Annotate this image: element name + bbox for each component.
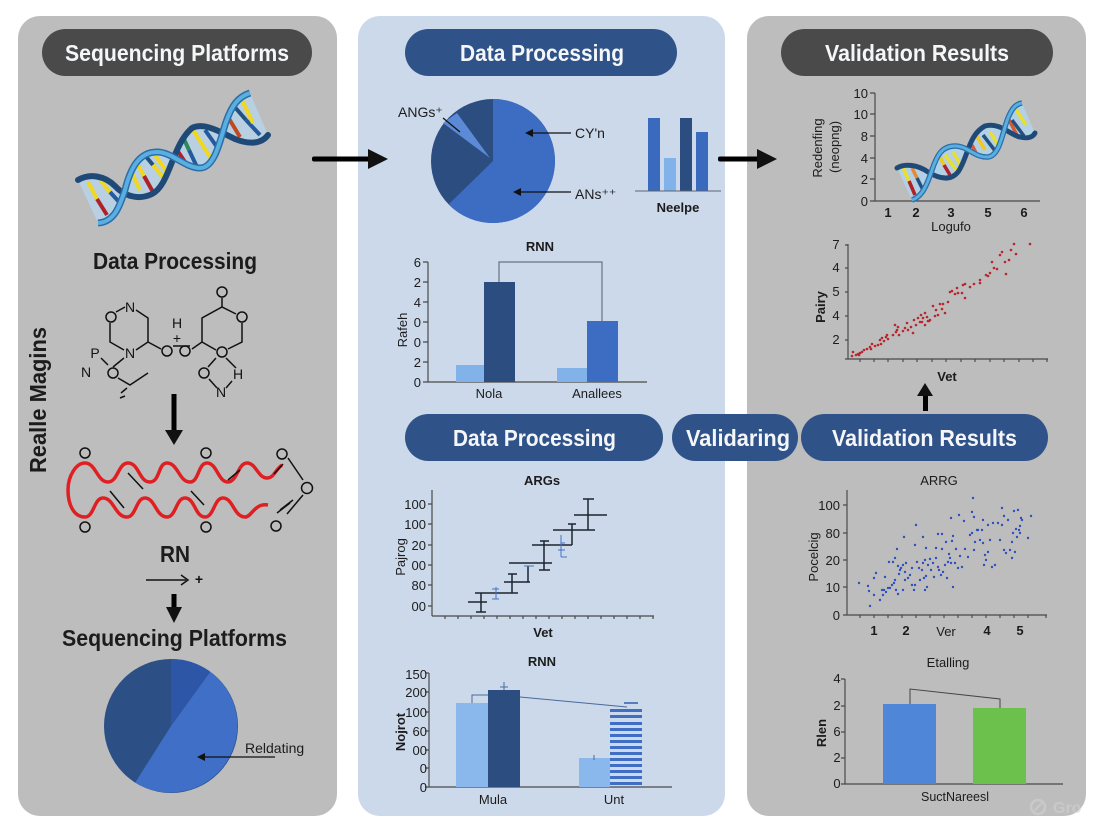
pill: validaring [672, 414, 798, 461]
scatter plot: red: Vet [937, 369, 957, 384]
label: RN: RN [160, 541, 190, 567]
scatter plot: blue: 20 [826, 553, 840, 568]
bar chart: RNN: Anallees [572, 386, 622, 401]
scatter plot: red: 7 [832, 237, 840, 252]
scatter plot: blue: 100 [818, 498, 840, 513]
bar chart: etalling: Etalling [927, 655, 969, 670]
bar chart: RNN lower: 150 [405, 667, 427, 682]
callout: reldating [197, 740, 304, 761]
chart: dna over axes: 4 [861, 151, 868, 166]
arrow: processing to validation [718, 149, 777, 169]
heading: data processing: Data Processing [460, 40, 624, 66]
pie chart: sequencing [104, 659, 304, 793]
bar chart: RNN lower: 100 [405, 705, 427, 720]
scatter plot: blue: 1 [870, 623, 878, 638]
scatter plot: blue: 80 [826, 526, 840, 541]
chart: dna over axes: 2 [861, 172, 868, 187]
bar chart: RNN: 2 [414, 275, 421, 290]
chart: dna over axes: 2 [912, 205, 920, 220]
scatter plot: blue: 10 [826, 580, 840, 595]
arrow: down to platforms [166, 594, 182, 623]
scatter plot: red: Pairy [813, 290, 828, 323]
heading: sequencing platforms [42, 29, 312, 76]
chart: dna over axes: 8 [861, 129, 868, 144]
bar chart: RNN lower: Nojrot [393, 712, 408, 751]
arrow: thin reaction [146, 571, 203, 587]
pie label: ANGs [398, 104, 460, 132]
bar chart: RNN lower: RNN [528, 654, 556, 669]
chart: dna over axes: 1 [884, 205, 892, 220]
chemical structure: H [172, 315, 182, 331]
pie label: CY'n: CY'n [575, 125, 605, 141]
molecule: red chain [68, 448, 312, 532]
error-bar chart: ARGs: ARGs [524, 473, 560, 488]
error-bar chart: ARGs: 100 [404, 517, 426, 532]
chart: dna over axes: 10 [854, 107, 868, 122]
bar chart: RNN [395, 239, 647, 401]
bar chart: RNN: 6 [414, 255, 421, 270]
bar chart: etalling: 2 [833, 750, 841, 765]
pie label: ANGs: ANGs⁺ [398, 104, 443, 120]
error-bar chart: ARGs: 00 [412, 599, 426, 614]
error-bar chart: ARGs: 00 [412, 558, 426, 573]
panel: sequencing platforms [18, 16, 337, 816]
chemical structure [81, 287, 247, 400]
error-bar chart: ARGs: 100 [404, 497, 426, 512]
scatter plot: blue: Ver [936, 624, 956, 639]
bar chart: neelpe [635, 118, 721, 215]
chart: dna over axes: 0 [861, 194, 868, 209]
watermark [1031, 800, 1082, 817]
heading: validation results [781, 29, 1053, 76]
panel: data processing [358, 16, 725, 816]
error-bar chart: ARGs: Vet [533, 625, 553, 640]
scatter plot: red: 4 [832, 260, 840, 275]
arrow: up to scatter [917, 383, 933, 411]
heading: sequencing platforms: Sequencing Platforms [65, 40, 289, 66]
scatter plot: red: 5 [832, 284, 840, 299]
chemical structure: H [233, 366, 243, 382]
chemical structure: N [125, 345, 135, 361]
bar chart: RNN: 2 [414, 355, 421, 370]
bar chart: etalling: SuctNareesl [921, 789, 989, 804]
error-bar chart: ARGs: 80 [412, 578, 426, 593]
chemical structure: N [216, 384, 226, 400]
bar chart: etalling: 6 [833, 724, 841, 739]
icon: dna helix [78, 93, 268, 223]
bar chart: RNN: 0 [414, 375, 421, 390]
bar chart: RNN: 0 [414, 335, 421, 350]
arrow: platforms to processing [312, 149, 388, 169]
bar chart: RNN: Rafeh [395, 313, 410, 347]
pie label: ANs: ANs⁺⁺ [575, 186, 616, 202]
bar chart: RNN lower: 200 [405, 685, 427, 700]
bar chart: RNN lower: Mula [479, 792, 508, 807]
chemical structure: N [125, 299, 135, 315]
bar chart: etalling: 0 [833, 776, 841, 791]
arrow: down to lipid [165, 394, 183, 445]
chart: dna over axes [810, 86, 1040, 234]
scatter plot: blue: 2 [902, 623, 910, 638]
pill: validation results [801, 414, 1048, 461]
chart: dna over axes: 10 [854, 86, 868, 101]
error-bar chart: ARGs: Pajrog [393, 538, 408, 576]
panel: validation results [747, 16, 1086, 817]
arrow: thin reaction: + [195, 571, 203, 587]
pill: data processing: Data Processing [453, 425, 616, 451]
chart: dna over axes: Redenfing [810, 118, 825, 178]
bar chart: neelpe: Neelpe [657, 200, 699, 215]
bar chart: etalling: 4 [833, 671, 841, 686]
bar chart: RNN: RNN [526, 239, 554, 254]
chemical structure: P [90, 345, 100, 361]
bar chart: etalling: 2 [833, 698, 841, 713]
pill: validaring: Validaring [686, 425, 790, 451]
heading: sequencing platforms lower: Sequencing Platforms [62, 625, 287, 651]
heading: data processing [405, 29, 677, 76]
scatter plot: blue: 4 [983, 623, 991, 638]
bar chart: RNN lower: Unt [604, 792, 625, 807]
scatter plot: red: 2 [832, 332, 840, 347]
bar chart: RNN: 4 [414, 295, 421, 310]
bar chart: RNN lower: 60 [413, 724, 427, 739]
error-bar chart: ARGs [393, 473, 654, 640]
bar chart: RNN lower: 0 [420, 761, 427, 776]
bar chart: RNN lower: 0 [420, 780, 427, 795]
scatter plot: blue: 0 [833, 608, 840, 623]
chart: dna over axes: 3 [947, 205, 955, 220]
chart: dna over axes: Logufo [931, 219, 971, 234]
heading: data processing: Data Processing [93, 248, 257, 274]
scatter plot: blue: Pocelcig [806, 532, 821, 582]
chemical structure: N [81, 364, 91, 380]
bar chart: RNN: Nola [476, 386, 503, 401]
callout: reldating: Reldating [245, 740, 304, 756]
scatter plot: blue: 5 [1016, 623, 1024, 638]
bar chart: etalling [814, 655, 1063, 804]
scatter plot: blue: ARRG [920, 473, 958, 488]
chart: dna over axes: (neopng) [827, 121, 842, 173]
heading: validation results: Validation Results [825, 40, 1009, 66]
bar chart: RNN: 0 [414, 315, 421, 330]
chart: dna over axes: 5 [984, 205, 992, 220]
scatter plot: blue [806, 473, 1047, 639]
watermark: Gro [1053, 800, 1082, 817]
pie chart: ARGs [398, 99, 616, 223]
pie label: CY'n [525, 125, 605, 141]
bar chart: RNN lower: 00 [413, 743, 427, 758]
pill: validation results: Validation Results [832, 425, 1017, 451]
scatter plot: red: 4 [832, 308, 840, 323]
scatter plot: red [813, 237, 1048, 384]
vertical label: Realle Magins [25, 327, 51, 473]
bar chart: etalling: Rlen [814, 719, 829, 747]
chart: dna over axes: 6 [1020, 205, 1028, 220]
error-bar chart: ARGs: 20 [412, 538, 426, 553]
pie label: ANs [513, 186, 616, 202]
chemical structure: + [173, 330, 181, 346]
pill: data processing [405, 414, 663, 461]
bar chart: RNN lower [393, 654, 672, 807]
